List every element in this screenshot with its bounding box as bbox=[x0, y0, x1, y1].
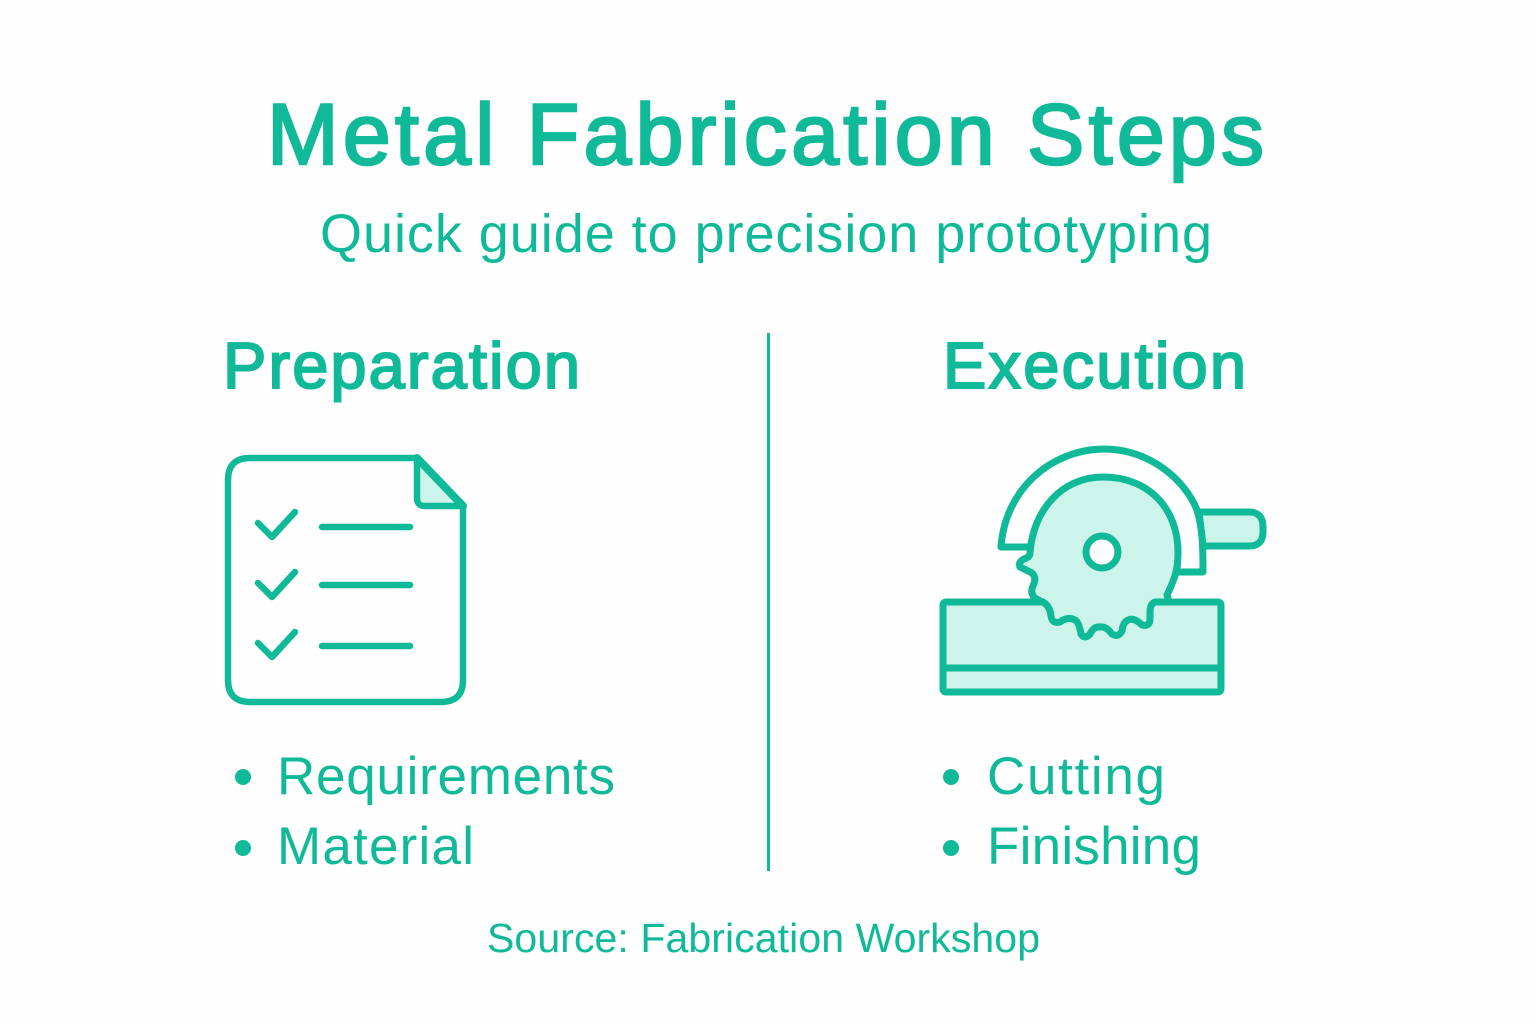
heading: preparation: Preparation bbox=[223, 329, 580, 402]
icon: circular saw bbox=[943, 449, 1263, 692]
source note: Source: Fabrication Workshop bbox=[487, 915, 1040, 961]
title: Metal Fabrication Steps bbox=[267, 87, 1264, 183]
list: execution items: Finishing bbox=[987, 817, 1201, 876]
subtitle: Quick guide to precision prototyping bbox=[320, 204, 1212, 264]
icon: checklist document bbox=[228, 458, 463, 702]
panel: preparation bbox=[223, 329, 615, 876]
panel: execution bbox=[943, 329, 1263, 876]
heading: execution: Execution bbox=[943, 329, 1246, 402]
list: preparation items: Requirements bbox=[277, 747, 615, 806]
list: preparation items bbox=[235, 747, 615, 876]
list: execution items: Cutting bbox=[987, 747, 1165, 806]
list: execution items bbox=[943, 747, 1201, 876]
list: preparation items: Material bbox=[277, 817, 474, 876]
